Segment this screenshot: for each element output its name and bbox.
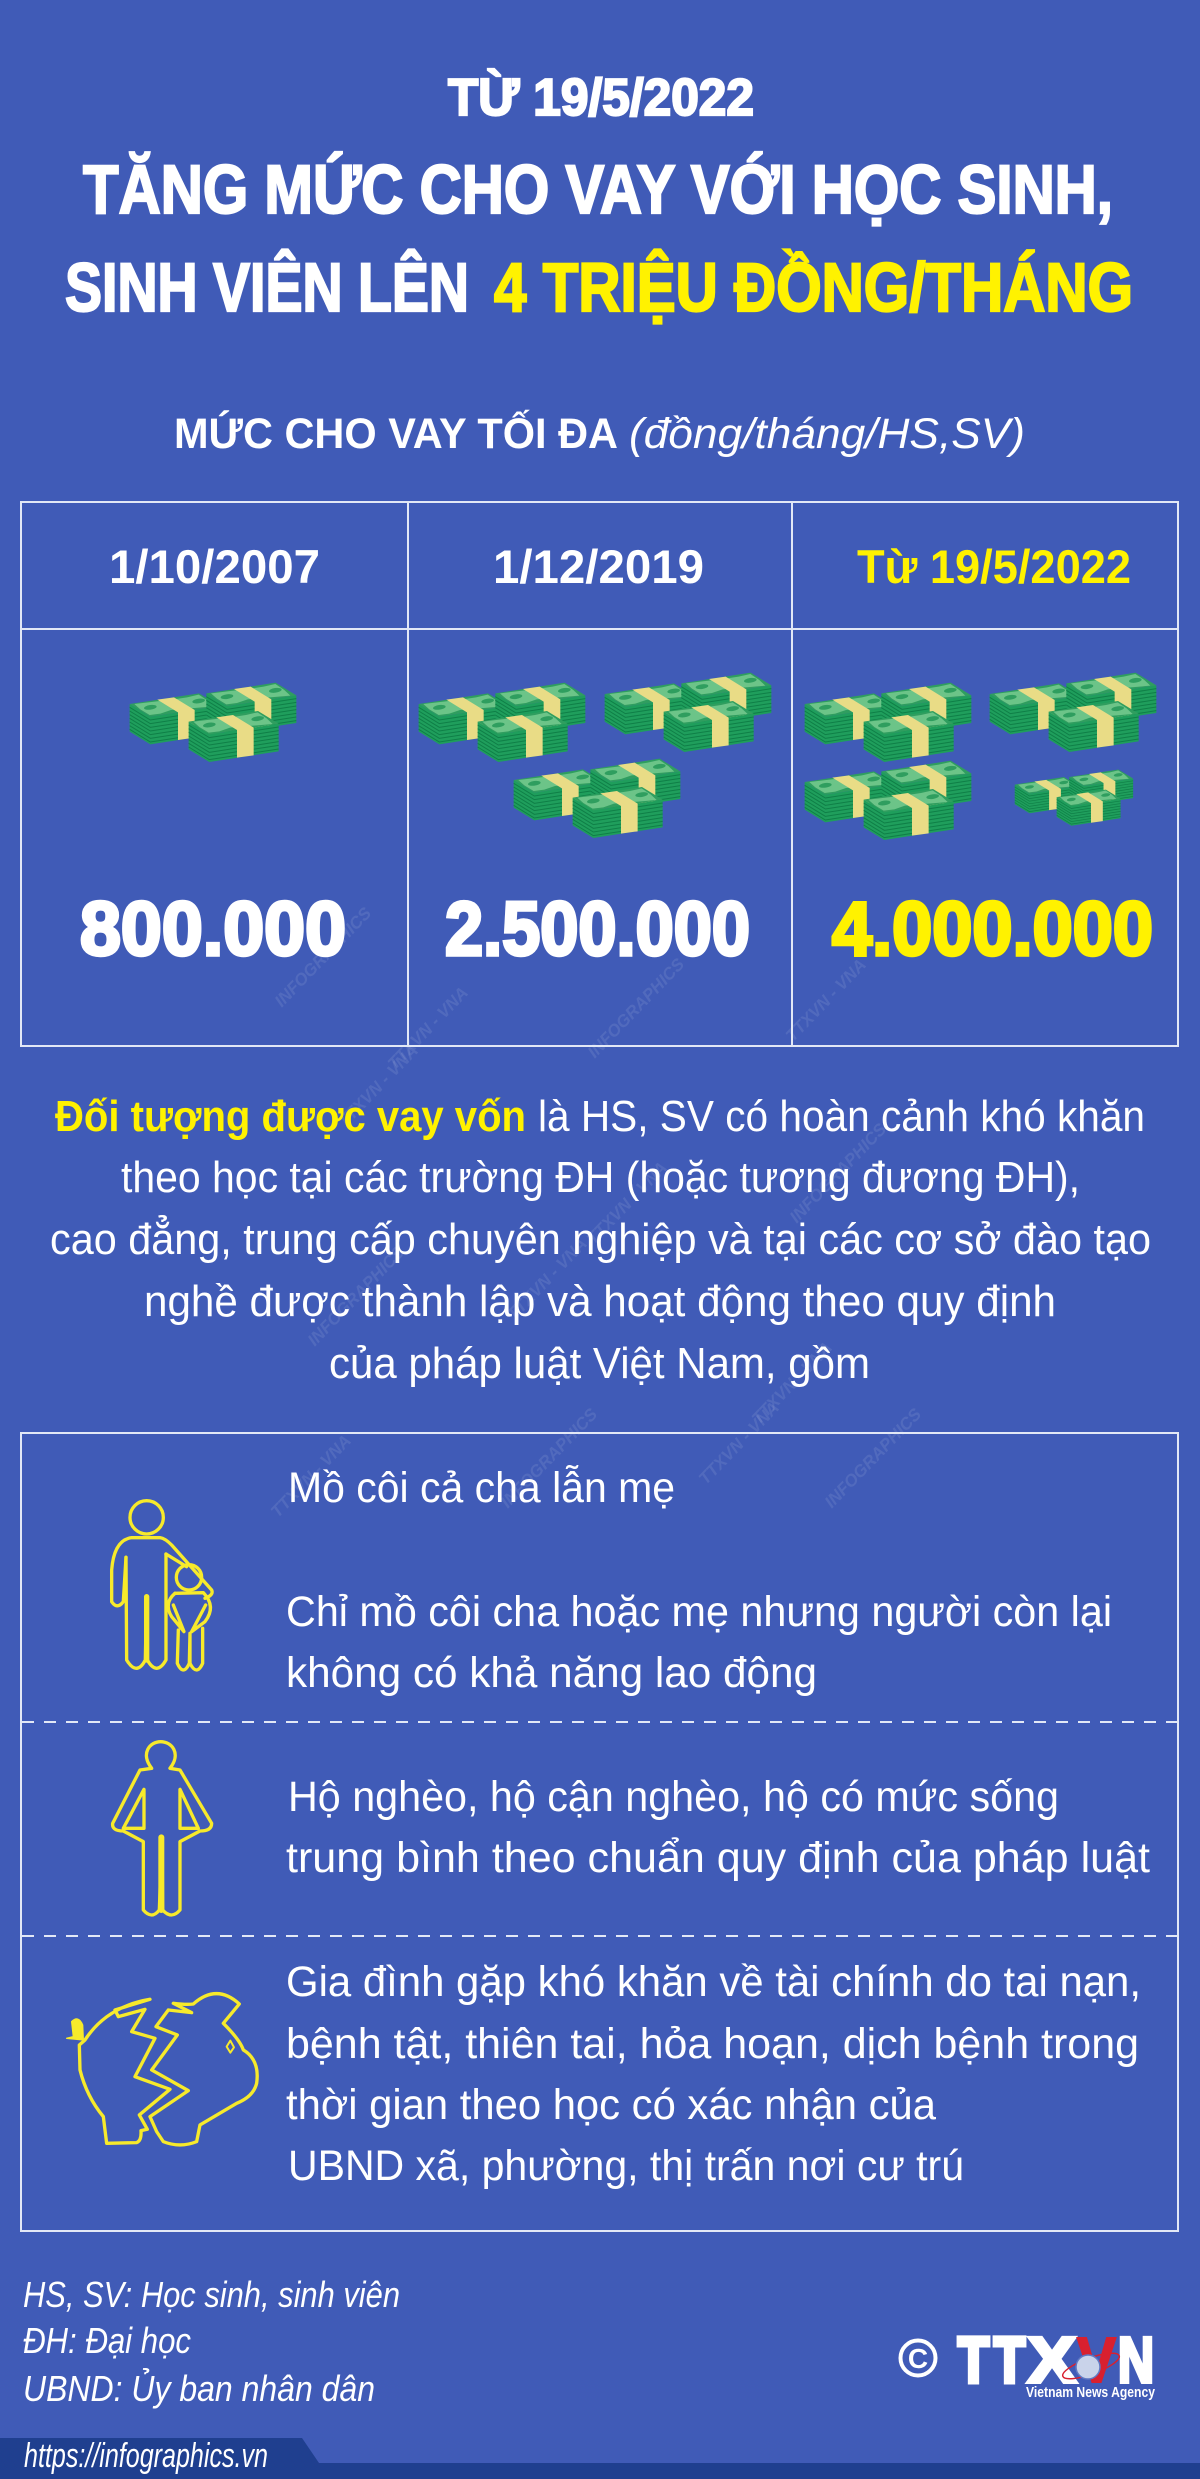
text block: eligible borrowers: cao đẳng, trung cấp chuyên nghiệp và tại các cơ sở đào tạo	[50, 1213, 1151, 1264]
text block: eligible borrowers: của pháp luật Việt Nam, gồm	[329, 1339, 870, 1388]
panel: borrower groups	[21, 1433, 1178, 2231]
title	[65, 69, 1133, 326]
subtitle: maximum loan: (đồng/tháng/HS,SV)	[629, 410, 1025, 458]
logo: TTXVN: Vietnam News Agency	[1026, 2384, 1156, 2401]
text: poor household criteria: Hộ nghèo, hộ cận nghèo, hộ có mức sống	[288, 1773, 1059, 1821]
column date 2019: 1/12/2019	[493, 540, 704, 593]
icon: adult with child	[112, 1501, 212, 1670]
watermark pattern: TTXVN - VNA	[503, 1234, 591, 1324]
logo: TTXVN: T	[994, 2324, 1025, 2396]
logo: TTXVN	[900, 2324, 1156, 2401]
icon: money stack 2007	[130, 683, 296, 762]
logo: TTXVN: V	[1077, 2324, 1116, 2396]
logo: TTXVN: C	[908, 2343, 928, 2374]
footnotes: abbreviations: ĐH: Đại học	[23, 2320, 191, 2361]
watermark pattern: INFOGRAPHICS	[304, 1242, 409, 1350]
text: orphan criteria	[286, 1464, 1112, 1697]
text: orphan criteria: Chỉ mồ côi cha hoặc mẹ nhưng người còn lại	[286, 1588, 1112, 1636]
text block: eligible borrowers: nghề được thành lập và hoạt động theo quy định	[144, 1277, 1056, 1326]
text: orphan criteria: không có khả năng lao động	[286, 1649, 817, 1697]
text: poor household criteria: trung bình theo chuẩn quy định của pháp luật	[286, 1834, 1150, 1882]
icon: money stacks 2019	[419, 673, 771, 838]
text: financial hardship criteria: bệnh tật, thiên tai, hỏa hoạn, dịch bệnh trong	[286, 2020, 1139, 2068]
text: financial hardship criteria: Gia đình gặp khó khăn về tài chính do tai nạn,	[286, 1958, 1141, 2006]
title: SINH VIÊN LÊN	[65, 249, 469, 326]
text: financial hardship criteria: thời gian theo học có xác nhận của	[286, 2081, 936, 2129]
footer band with url	[0, 2437, 1200, 2479]
logo: TTXVN: X	[1028, 2324, 1076, 2396]
subtitle: maximum loan: MỨC CHO VAY TỐI ĐA	[174, 409, 618, 458]
watermark pattern: INFOGRAPHICS	[271, 903, 376, 1011]
watermark pattern: TTXVN - VNA	[334, 1041, 422, 1131]
text block: eligible borrowers: Đối tượng được vay vốn	[55, 1092, 526, 1141]
text: financial hardship criteria: UBND xã, phường, thị trấn nơi cư trú	[288, 2142, 964, 2190]
text: financial hardship criteria	[286, 1958, 1141, 2190]
footnotes: abbreviations: HS, SV: Học sinh, sinh viên	[23, 2274, 400, 2315]
text block: eligible borrowers: là HS, SV có hoàn cảnh khó khăn	[538, 1092, 1145, 1141]
icon: money stacks 2022	[805, 673, 1156, 840]
icon: broken piggy bank	[67, 1994, 257, 2145]
text: orphan criteria: Mồ côi cả cha lẫn mẹ	[288, 1464, 675, 1512]
watermark pattern: INFOGRAPHICS	[497, 1404, 602, 1512]
amount 4.000.000: 4.000.000	[832, 887, 1153, 972]
icon: person with empty pockets	[113, 1742, 212, 1915]
logo: TTXVN: N	[1118, 2324, 1154, 2396]
logo: TTXVN: T	[958, 2324, 989, 2396]
watermark pattern: INFOGRAPHICS	[786, 1119, 891, 1227]
watermark pattern: TTXVN - VNA	[748, 1338, 836, 1428]
watermark pattern: INFOGRAPHICS	[821, 1404, 926, 1512]
text block: eligible borrowers	[50, 1092, 1151, 1388]
column date 2022: Từ 19/5/2022	[857, 540, 1131, 593]
text block: eligible borrowers: theo học tại các trường ĐH (hoặc tương đương ĐH),	[121, 1153, 1080, 1202]
footer band with url: https://infographics.vn	[24, 2437, 268, 2475]
watermark pattern: TTXVN - VNA	[782, 955, 870, 1045]
amount 800.000: 800.000	[80, 887, 346, 972]
watermark pattern: TTXVN - VNA	[695, 1398, 783, 1488]
panel: loan table	[21, 502, 1178, 1046]
subtitle: maximum loan	[174, 409, 1025, 458]
column date 2007: 1/10/2007	[109, 540, 320, 593]
watermark pattern: TTXVN - VNA	[583, 1158, 671, 1248]
watermark pattern: INFOGRAPHICS	[584, 954, 689, 1062]
watermark pattern: TTXVN - VNA	[384, 983, 472, 1073]
footnotes: abbreviations: UBND: Ủy ban nhân dân	[23, 2367, 375, 2409]
watermark pattern: TTXVN - VNA	[267, 1431, 355, 1521]
text: poor household criteria	[286, 1773, 1150, 1882]
title: TỪ 19/5/2022	[448, 69, 754, 127]
footnotes: abbreviations	[23, 2274, 400, 2409]
watermark pattern	[267, 903, 926, 1521]
amount 2.500.000: 2.500.000	[445, 887, 750, 972]
